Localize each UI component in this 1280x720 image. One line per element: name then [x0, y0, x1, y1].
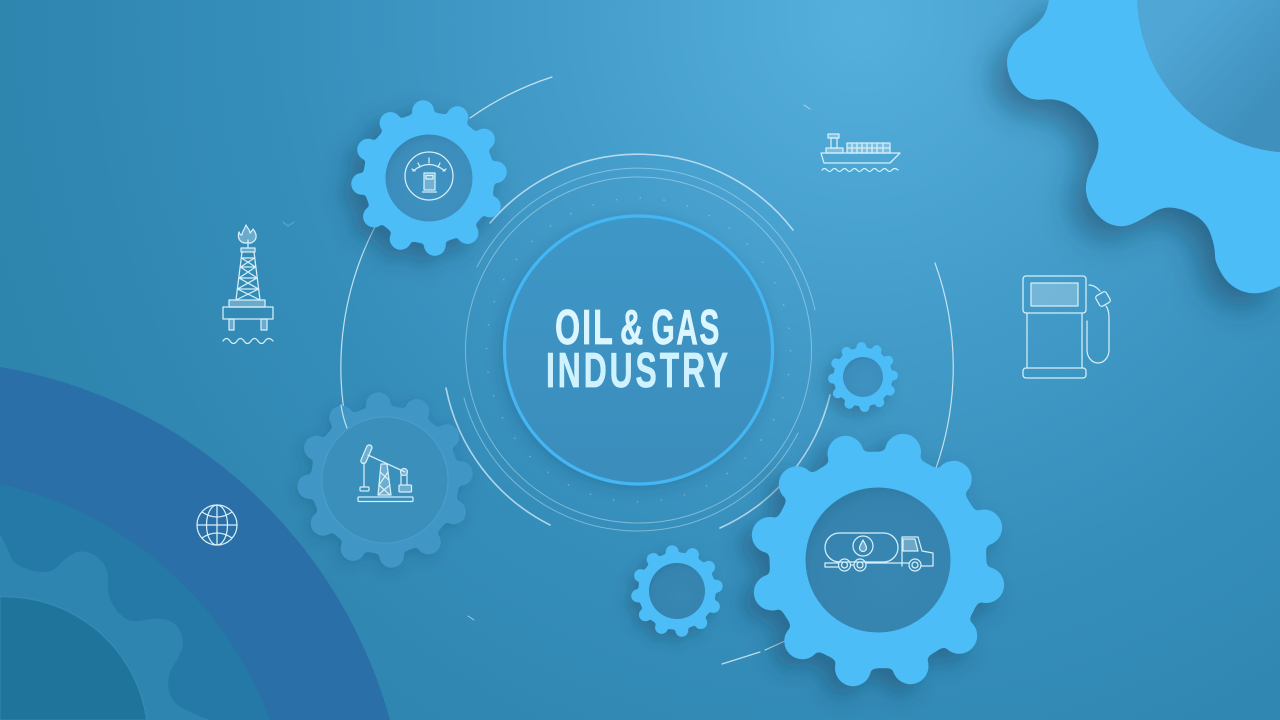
title: INDUSTRY — [546, 343, 731, 398]
central disc — [504, 216, 772, 484]
gear: fuel gauge — [344, 93, 514, 263]
decoration: top-right large gear — [1007, 0, 1280, 293]
icon: offshore oil rig — [223, 225, 273, 344]
title: GAS — [652, 299, 721, 355]
outer orbit arcs — [341, 77, 953, 664]
gear: pumpjack — [290, 385, 480, 575]
decoration: bottom-left concentric shapes and gear — [0, 367, 390, 720]
icon: fuel gauge — [405, 152, 453, 200]
gear: small right — [826, 340, 900, 414]
central rings — [446, 154, 830, 531]
icon: fuel pump — [1023, 276, 1111, 378]
arc over gear — [341, 405, 347, 428]
icon: tanker truck — [825, 533, 933, 571]
title: & — [620, 299, 643, 355]
title — [546, 299, 731, 398]
icon: cargo ship — [821, 134, 900, 172]
thin rings — [464, 168, 815, 531]
bright segmented ring — [446, 154, 830, 528]
gear: small bottom — [626, 540, 728, 642]
icon: globe — [197, 505, 237, 545]
title: OIL — [555, 299, 615, 355]
small tick marks — [283, 105, 810, 620]
icon: pumpjack — [358, 445, 413, 502]
gear: large tanker truck — [723, 405, 1033, 715]
dotted ring — [486, 198, 790, 502]
